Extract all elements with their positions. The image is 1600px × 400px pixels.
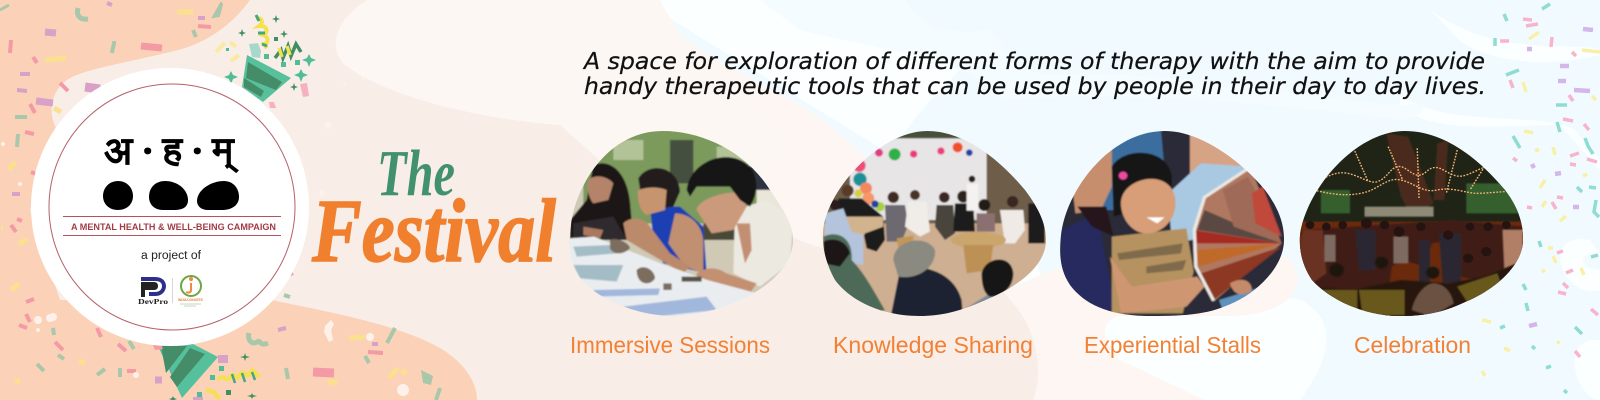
- photo: knowledge sharing: [820, 127, 1050, 320]
- ribbons: [256, 18, 268, 48]
- smiling girl: [1112, 228, 1194, 313]
- DevPro logo: [138, 277, 169, 306]
- photo: celebration: [1300, 131, 1523, 316]
- confetti popper: bottom: [153, 344, 260, 400]
- dancing crowd: [1299, 220, 1523, 313]
- audience and wicker chairs: [1318, 256, 1516, 316]
- logo title in Devanagari: अ · ह · म्: [104, 123, 238, 183]
- script word: Festival: Festival: [311, 182, 556, 281]
- confetti popper: top: [216, 15, 316, 108]
- intro text: [582, 49, 1486, 100]
- category labels: [570, 332, 1471, 358]
- category labels: Celebration: [1354, 332, 1471, 358]
- string lights: [1316, 146, 1506, 198]
- photo: experiential stalls: [1055, 127, 1292, 320]
- DevPro logo: DevPro: [138, 298, 169, 306]
- confetti: left: [0, 0, 945, 400]
- photo: immersive sessions: [563, 127, 797, 320]
- person left: [570, 163, 633, 240]
- three black pebbles: [103, 181, 239, 210]
- front row people: [823, 234, 885, 317]
- older girl: [1061, 213, 1115, 310]
- pom poms: [853, 142, 973, 211]
- campaign tagline: A MENTAL HEALTH & WELL-BEING CAMPAIGN: [71, 222, 276, 232]
- spool tables: [951, 232, 1006, 248]
- intro text: A space for exploration of different forms of therapy with the aim to provide: [582, 49, 1485, 75]
- seated people: [825, 176, 1045, 265]
- category labels: Immersive Sessions: [570, 332, 770, 358]
- intro text: handy therapeutic tools that can be used by people in their day to day lives.: [584, 74, 1486, 100]
- script word: The: The: [377, 137, 455, 210]
- category labels: Knowledge Sharing: [833, 332, 1033, 358]
- paper fan: [1194, 167, 1282, 302]
- India Donates logo: INDIA DONATES: [178, 298, 204, 302]
- confetti: right: [1482, 4, 1600, 393]
- table with papers: [569, 237, 757, 317]
- category labels: Experiential Stalls: [1084, 332, 1261, 358]
- person right: [733, 200, 793, 287]
- logo badge: [31, 68, 309, 346]
- project of line: a project of: [141, 250, 202, 262]
- India Donates logo: [178, 276, 204, 306]
- heading: The Festival: [311, 137, 556, 281]
- person middle: [650, 207, 707, 273]
